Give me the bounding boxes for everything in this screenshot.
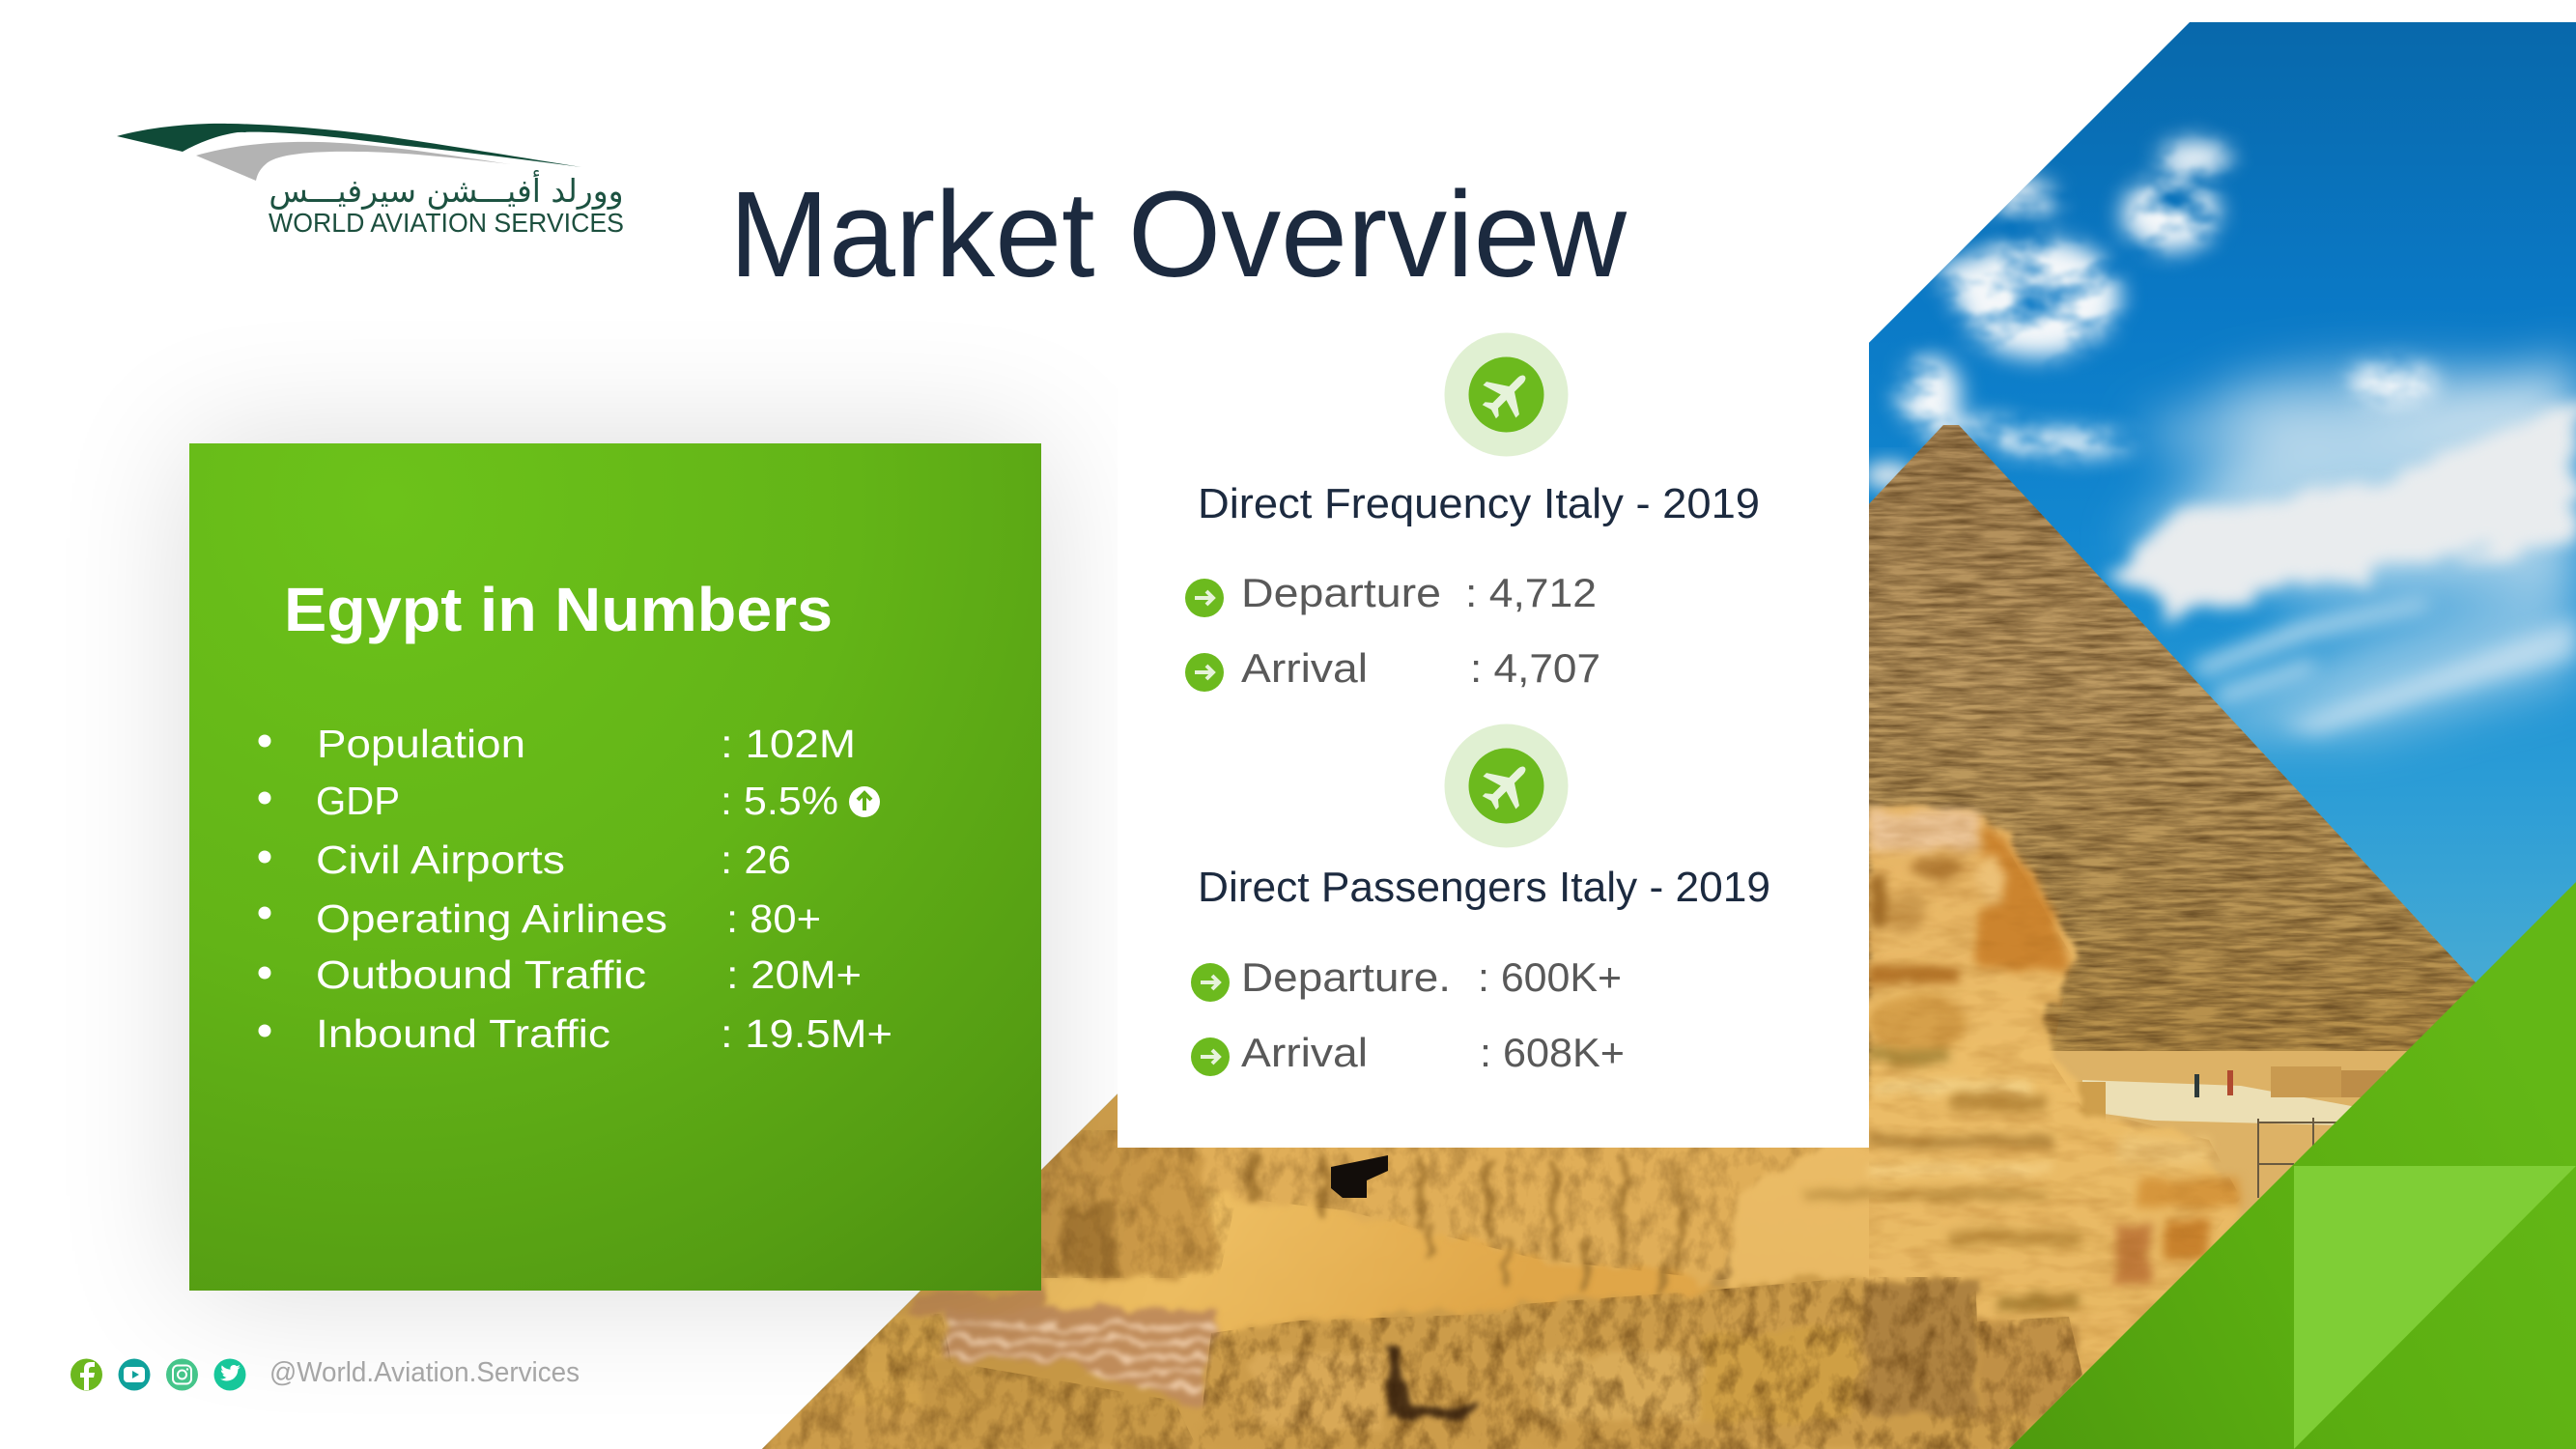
row: inbound traffic: : 19.5M+: [721, 1011, 892, 1056]
row: passengers departure: Departure.: [1241, 954, 1451, 1000]
green corner decoration: [2009, 882, 2576, 1449]
row: operating airlines: [316, 896, 821, 941]
row: civil airports: Civil Airports: [316, 838, 565, 882]
row: civil airports: [316, 838, 791, 882]
row: passengers arrival: : 608K+: [1480, 1030, 1625, 1075]
row: inbound traffic: [316, 1011, 892, 1056]
title: Market Overview: [729, 166, 1628, 302]
row: GDP: [316, 779, 838, 823]
sphinx stone detail: [1869, 811, 2241, 1449]
row: operating airlines: Operating Airlines: [316, 896, 667, 941]
row: GDP: : 5.5%: [721, 779, 838, 823]
row: passengers departure: [1191, 954, 1622, 1002]
foreground rock texture: [1198, 1277, 2082, 1449]
row: passengers departure: : 600K+: [1478, 954, 1622, 1000]
row: frequency arrival: : 4,707: [1470, 645, 1600, 691]
panel heading: Egypt in Numbers: [284, 575, 833, 644]
social handle: @World.Aviation.Services: [269, 1357, 580, 1388]
foreground rocks and stairs: [753, 1277, 2082, 1449]
icon: airplane frequency: [1445, 332, 1569, 456]
icon: GDP up arrow: [849, 786, 880, 817]
row: inbound traffic: Inbound Traffic: [316, 1011, 610, 1056]
row: operating airlines: : 80+: [726, 896, 821, 941]
wisps under the band: [2190, 599, 2576, 734]
row: frequency arrival: Arrival: [1241, 645, 1368, 691]
dark cave opening: [1331, 1155, 1388, 1198]
sphinx shading: [1806, 811, 2241, 1310]
hazy high cloud: [2125, 357, 2576, 734]
heading: direct frequency: Direct Frequency Italy - 2019: [1198, 480, 1760, 527]
base rock fill: [753, 1082, 2106, 1449]
row: population: Population: [317, 722, 525, 766]
small cloud near pyramid: [1863, 463, 1913, 488]
logo English name: WORLD AVIATION SERVICES: [269, 208, 624, 238]
logo swoosh dark: [117, 124, 581, 167]
soft shadow around the green panel: [189, 443, 1041, 1291]
pyramid stone courses: [1869, 425, 2476, 1076]
panel: Italy traffic card: [1118, 300, 1869, 1148]
row: frequency departure: [1185, 570, 1597, 617]
rock wall texture: [1033, 1130, 1893, 1280]
clouds: [1899, 140, 2437, 456]
logo Arabic name: وورلد أفيـــشن سيرفيـــس: [269, 170, 624, 210]
card background: [1118, 300, 1869, 1148]
row: population: [317, 722, 856, 766]
row: outbound traffic: : 20M+: [726, 952, 862, 997]
row: outbound traffic: [316, 952, 862, 997]
row: frequency departure: Departure: [1241, 570, 1441, 615]
sand and plateau behind the sphinx: [2050, 1051, 2407, 1242]
heading: direct passengers: Direct Passengers Italy - 2019: [1198, 864, 1770, 911]
row: GDP: GDP: [316, 779, 400, 823]
left rock texture: [762, 1314, 1198, 1449]
row: civil airports: : 26: [721, 838, 791, 882]
icon: youtube: [118, 1358, 151, 1391]
sky: [753, 22, 2576, 1449]
icon: twitter: [214, 1358, 245, 1391]
row: frequency arrival: [1185, 645, 1600, 692]
main white cloud band: [2106, 396, 2576, 613]
rock wall and left cliff: [1041, 1136, 1820, 1296]
logo: World Aviation Services: [117, 124, 624, 238]
logo swoosh grey: [196, 142, 510, 181]
social media footer: [71, 1357, 580, 1391]
icon: airplane passengers: [1445, 724, 1569, 848]
panel background: [189, 443, 1041, 1291]
row: frequency departure: : 4,712: [1465, 570, 1597, 615]
row: outbound traffic: Outbound Traffic: [316, 952, 646, 997]
panel: Egypt in Numbers: [189, 443, 1041, 1291]
sphinx silhouette: [1729, 805, 2244, 1449]
row: passengers arrival: [1191, 1030, 1625, 1076]
photo: pyramid and sphinx: [753, 22, 2576, 1449]
row: population: : 102M: [721, 722, 856, 766]
sphinx body and head: [1729, 805, 2244, 1449]
sand slope: [1043, 1189, 1708, 1337]
bullets: [259, 734, 270, 1037]
great pyramid: [1869, 425, 2476, 1082]
icon: instagram: [166, 1358, 198, 1391]
row: passengers arrival: Arrival: [1241, 1030, 1368, 1075]
icon: facebook: [71, 1358, 102, 1391]
dark rock crevice: [1389, 1343, 1482, 1422]
